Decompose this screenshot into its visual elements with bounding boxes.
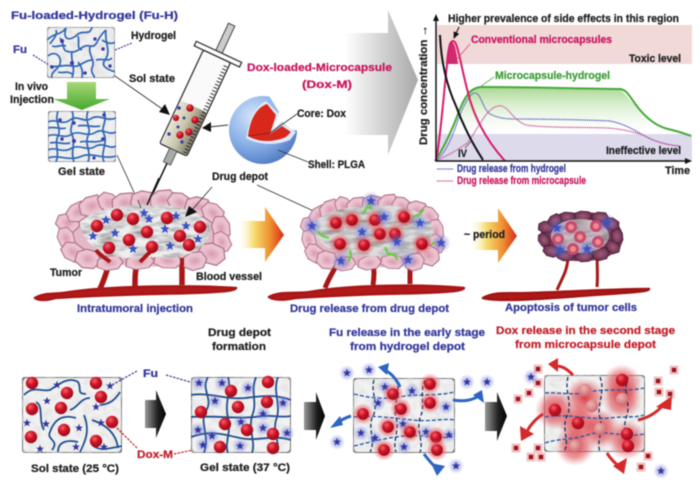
arrow head: sol state xyxy=(159,104,170,115)
label: In vivo injection: In vivo xyxy=(15,81,48,93)
heading: Fu release xyxy=(329,327,485,353)
label: microcapsule-hydrogel: Microcapsule-hydrogel xyxy=(495,70,610,82)
band: toxic level xyxy=(437,25,692,64)
label: Hydrogel xyxy=(115,30,176,50)
heading: Fu-loaded-Hydrogel: Fu-loaded-Hydrogel (Fu-H) xyxy=(11,10,178,22)
needle in tumor xyxy=(147,178,159,205)
label: toxic level: Toxic level xyxy=(629,53,681,65)
curve: conventional microcapsules xyxy=(436,41,505,161)
red release arrows xyxy=(520,358,672,474)
area under microcapsule-hydrogel xyxy=(452,87,650,134)
heading: Dox release: from microcapsule depot xyxy=(515,339,656,351)
label: Dox-M with leaders: Dox-M xyxy=(137,449,173,461)
blood vessel xyxy=(35,286,236,300)
heading: drug depot formation: Drug depot xyxy=(208,327,271,339)
label: Fu: Fu xyxy=(13,44,27,56)
label: Drug depot: Drug depot xyxy=(212,171,268,183)
panel: Fu release box xyxy=(329,327,495,476)
label: Fu xyxy=(13,44,49,65)
panel: Dox release box xyxy=(496,325,678,479)
caption: drug release: Drug release from drug depot xyxy=(290,303,449,315)
label: Tumor: Tumor xyxy=(50,267,83,279)
heading: drug depot formation xyxy=(208,327,271,353)
heading: Dox release: Dox release in the second stage xyxy=(496,325,675,337)
callout: higher prevalence xyxy=(448,13,679,38)
label: In vivo injection: Injection xyxy=(10,94,54,106)
axes xyxy=(433,14,692,164)
heading: drug depot formation: formation xyxy=(212,341,266,353)
arrow: to drug release xyxy=(238,207,284,262)
legend: Drug release from microcapsule xyxy=(457,175,586,187)
label: Sol state: Sol state xyxy=(129,73,175,85)
big gray arrow xyxy=(345,10,418,155)
arrow: drug depot to tumor 2 xyxy=(257,185,326,218)
heading: Dox-loaded-Microcapsule: Dox-loaded-Microcapsule xyxy=(247,62,392,74)
arrow: drug depot to tumor 1 xyxy=(185,187,212,217)
peak above toxic level xyxy=(446,42,458,64)
callout: higher prevalence: Higher prevalence of side effects in this region xyxy=(448,13,679,25)
label: Hydrogel: Hydrogel xyxy=(131,30,176,42)
label: conventional microcapsules: Conventional microcapsules xyxy=(471,34,612,46)
label: IV xyxy=(458,140,472,160)
label: Time: Time xyxy=(665,165,690,177)
syringe xyxy=(127,14,254,211)
label: Dox-M with leaders xyxy=(115,426,212,461)
syringe contents xyxy=(167,104,199,144)
curve: drug release from hydrogel xyxy=(436,93,679,161)
label: Shell PLGA: Shell: PLGA xyxy=(308,159,365,171)
panel: gel state box xyxy=(190,327,295,454)
chart: drug concentration over time xyxy=(418,13,692,187)
gel state hydrogel square xyxy=(48,111,116,162)
panel: sol state box xyxy=(22,377,122,453)
line: gel state into tumor xyxy=(138,200,141,208)
heading: Dox release xyxy=(496,325,675,351)
arrow: period xyxy=(470,208,517,263)
arrow: Fu release to Dox release xyxy=(485,392,507,441)
curve: drug release from microcapsule xyxy=(436,106,679,161)
arrow: in vivo injection xyxy=(53,82,110,110)
blood vessel xyxy=(483,289,649,300)
sol state hydrogel square xyxy=(47,27,116,78)
label: Blood vessel: Blood vessel xyxy=(196,271,262,283)
arrow: gel to Fu release xyxy=(304,392,325,440)
tumor: apoptosis xyxy=(483,211,649,300)
label: period: ~ period xyxy=(464,229,505,241)
arrow: sol state to syringe xyxy=(115,76,168,113)
microcapsule diagram xyxy=(202,94,308,164)
heading: Fu release: Fu release in the early stage xyxy=(329,327,485,339)
blood vessel xyxy=(269,286,464,300)
band: ineffective level xyxy=(437,134,692,161)
heading: Dox-loaded-Microcapsule xyxy=(247,62,392,91)
blue release arrows xyxy=(330,363,484,476)
heading: Dox-loaded-Microcapsule: (Dox-M) xyxy=(302,79,352,91)
tumor: drug release xyxy=(269,191,464,300)
label: Fu with leaders xyxy=(112,368,197,385)
caption: gel state: Gel state (37 °C) xyxy=(200,462,290,474)
caption: apoptosis: Apoptosis of tumor cells xyxy=(505,302,637,314)
y axis label: Drug concentration → xyxy=(418,25,430,145)
label: ineffective level: Ineffective level xyxy=(606,145,681,157)
arrow: sol to gel xyxy=(145,390,166,438)
legend xyxy=(437,163,586,187)
heading: Fu release: from hydrogel depot xyxy=(350,341,465,353)
line: gel state to tumor xyxy=(117,155,138,201)
label: IV: IV xyxy=(458,148,468,160)
caption: sol state: Sol state (25 °C) xyxy=(31,463,119,475)
label: Fu with leaders: Fu xyxy=(143,368,158,380)
label: Gel state: Gel state xyxy=(58,166,105,178)
curve: IV xyxy=(440,35,483,160)
label: Core Dox: Core: Dox xyxy=(297,108,347,120)
legend: Drug release from hydrogel xyxy=(457,163,566,175)
tumor: intratumoral injection xyxy=(35,188,236,300)
curve: microcapsule-hydrogel xyxy=(435,87,691,161)
panel: Fu-loaded hydrogel xyxy=(10,10,178,178)
label: In vivo injection xyxy=(10,81,54,106)
label: microcapsule-hydrogel xyxy=(480,70,610,87)
label: conventional microcapsules xyxy=(456,34,612,60)
caption: intratumoral injection: Intratumoral injection xyxy=(77,303,193,315)
